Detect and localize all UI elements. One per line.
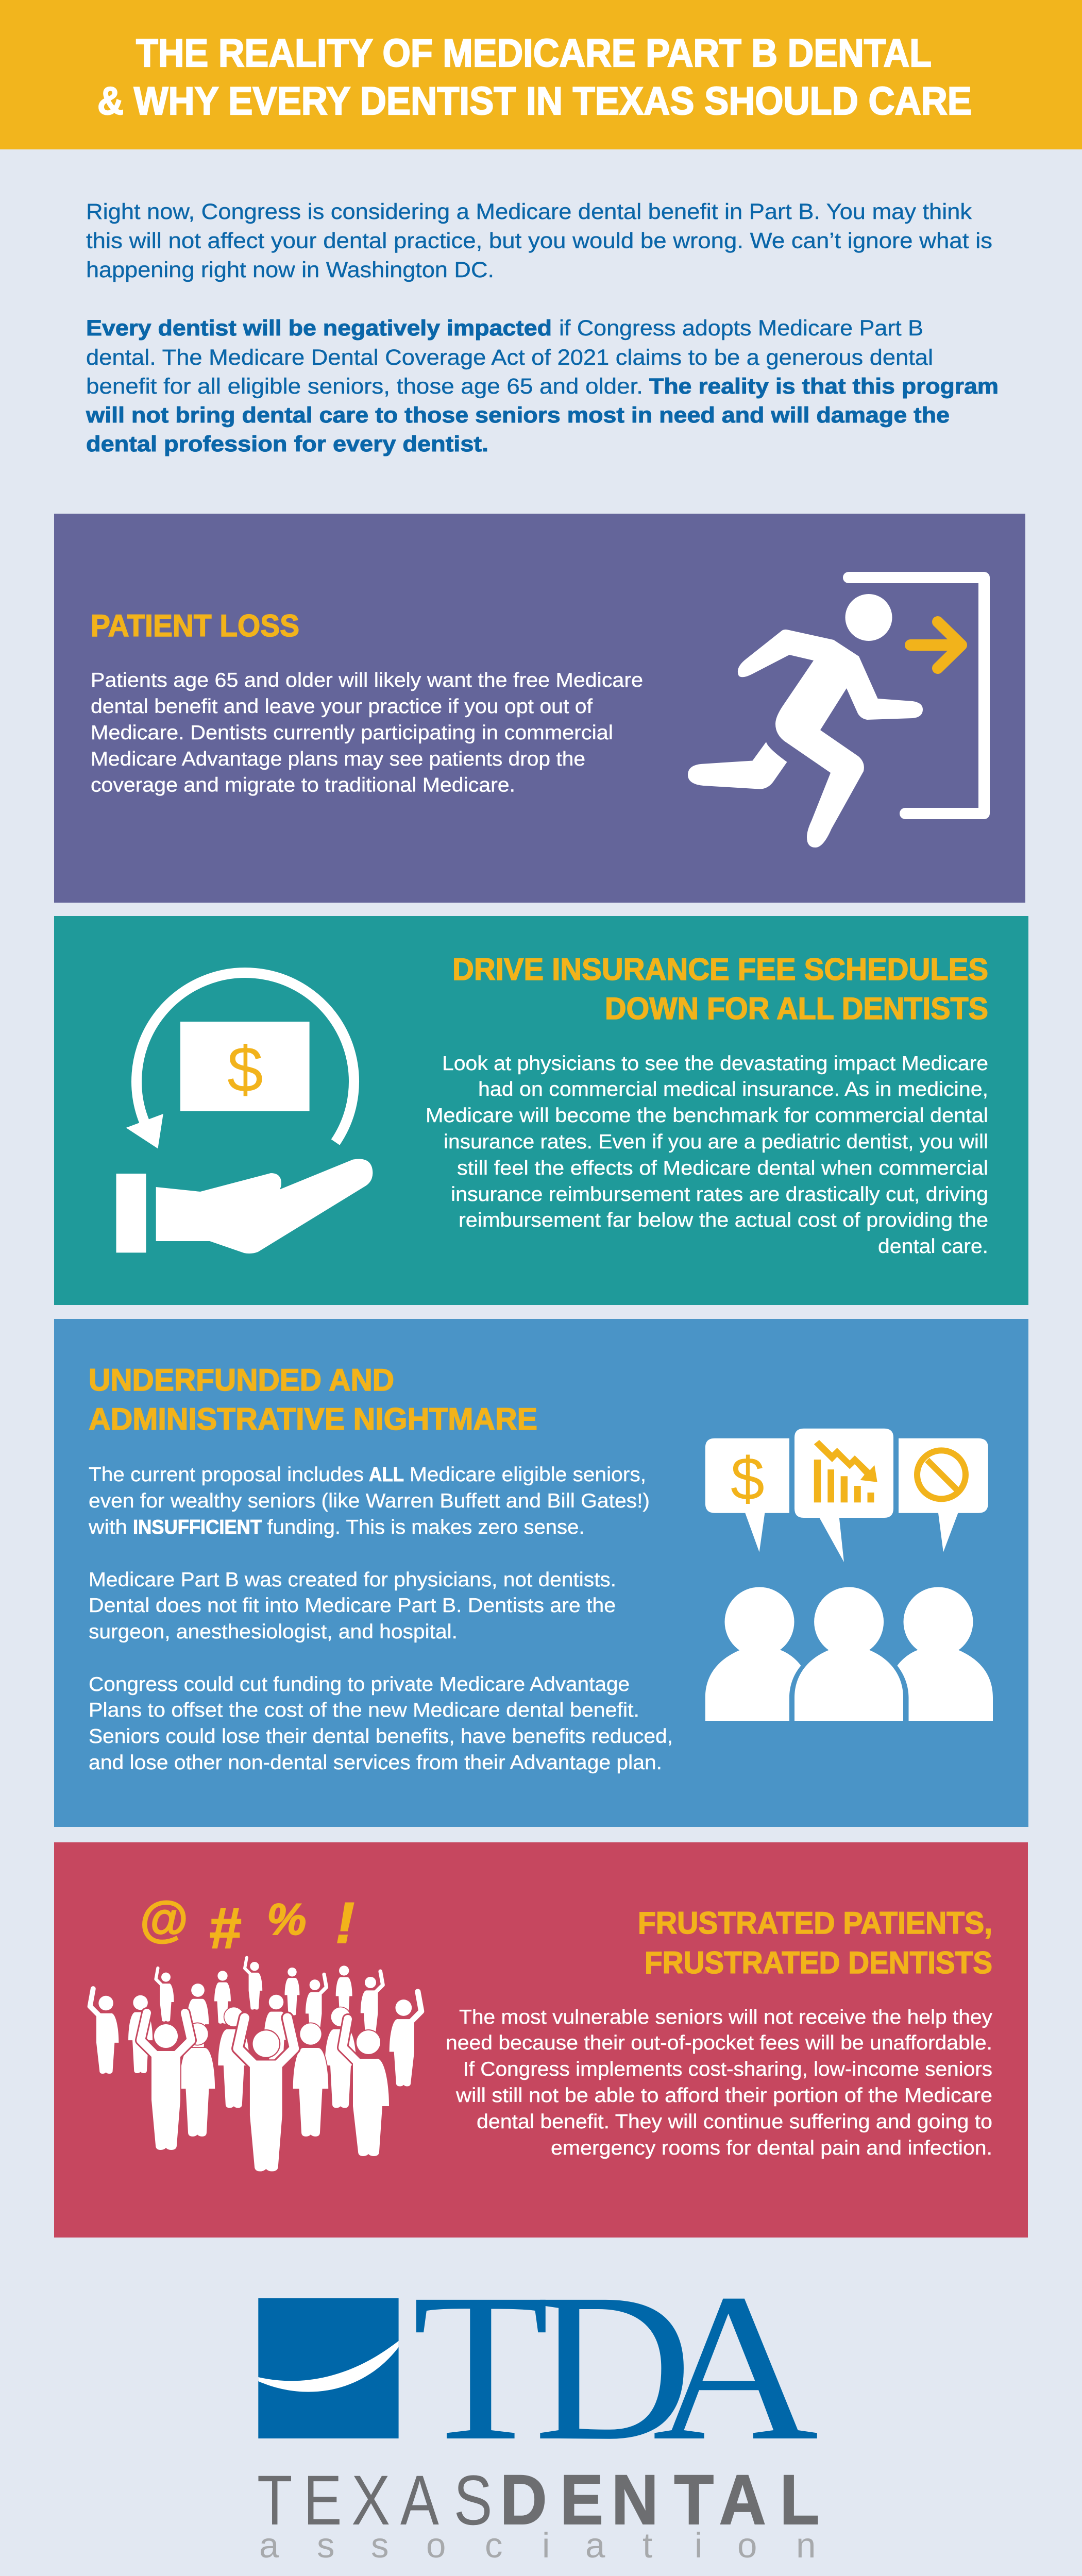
- intro paragraph 2: benefit for all eligible seniors, those age 65 and older.: [86, 374, 643, 399]
- text: underfunded paragraph 1: The current proposal includes: [89, 1464, 364, 1486]
- text: underfunded paragraph 3: Congress could cut funding to private Medicare Advantage: [89, 1673, 630, 1696]
- panel: drive insurance fee schedules down: [54, 916, 1028, 1305]
- heading: drive insurance fee schedules: DOWN FOR ALL DENTISTS: [605, 991, 988, 1026]
- text: patient loss body: Medicare Advantage plans may see patients drop the: [91, 748, 585, 770]
- logo wordmark: TDA: T: [412, 2250, 549, 2484]
- logo text: Texas Dental: [257, 2460, 819, 2540]
- text: frustrated body: will still not be able to afford their portion of the Medicare: [455, 2084, 992, 2107]
- intro paragraph 2: dental profession for every dentist.: [86, 432, 488, 456]
- text: frustrated body: [446, 2006, 993, 2159]
- intro paragraph 2: [86, 316, 999, 456]
- intro paragraph 1: Right now, Congress is considering a Medicare dental benefit in Part B. You may think: [86, 199, 972, 224]
- heading: frustrated patients: FRUSTRATED PATIENTS,: [638, 1906, 992, 1940]
- text: underfunded paragraph 3: Plans to offset the cost of the new Medicare dental benefit.: [89, 1699, 639, 1721]
- text: underfunded paragraph 3: [89, 1673, 673, 1774]
- intro paragraph 2: dental. The Medicare Dental Coverage Act of 2021 claims to be a generous dental: [86, 345, 933, 370]
- heading: drive insurance fee schedules: [452, 952, 988, 1026]
- title banner: THE REALITY OF MEDICARE PART B DENTAL: [136, 31, 932, 75]
- panel: frustrated patients, frustrated dentists: [54, 1842, 1028, 2238]
- text: patient loss body: Medicare. Dentists currently participating in commercial: [91, 722, 613, 744]
- text: patient loss body: [91, 669, 643, 796]
- title banner: & WHY EVERY DENTIST IN TEXAS SHOULD CARE: [97, 79, 972, 123]
- heading: frustrated patients: [638, 1906, 992, 1980]
- text: fee schedules body: insurance rates. Even if you are a pediatric dentist, you will: [444, 1131, 988, 1153]
- intro paragraph 2: if Congress adopts Medicare Part B: [559, 316, 923, 341]
- panel: underfunded and administrative nightmare: [54, 1319, 1028, 1827]
- heading: underfunded: UNDERFUNDED AND: [89, 1363, 394, 1397]
- logo: Texas Dental Association: [257, 2250, 819, 2565]
- icon: person running out of a door: [688, 578, 984, 848]
- icon: hand with circulating money: [116, 973, 373, 1253]
- text: frustrated body: The most vulnerable seniors will not receive the help they: [459, 2006, 993, 2028]
- text: fee schedules body: had on commercial medical insurance. As in medicine,: [478, 1078, 988, 1100]
- text: fee schedules body: [426, 1053, 988, 1258]
- icon: three people: [705, 1587, 993, 1721]
- heading: underfunded: ADMINISTRATIVE NIGHTMARE: [89, 1402, 537, 1436]
- heading: patient loss: PATIENT LOSS: [91, 608, 299, 643]
- text: frustrated body: dental benefit. They will continue suffering and going to: [477, 2111, 992, 2133]
- logo text: association: association: [259, 2526, 816, 2565]
- heading: frustrated patients: FRUSTRATED DENTISTS: [645, 1945, 992, 1980]
- title banner: [0, 0, 1082, 149]
- icon: frustration symbols: [139, 1891, 354, 1960]
- text: underfunded paragraph 1: funding. This is makes zero sense.: [267, 1516, 584, 1538]
- text: fee schedules body: Look at physicians to see the devastating impact Medicare: [442, 1053, 988, 1075]
- text: underfunded paragraph 1: Medicare eligible seniors,: [410, 1464, 646, 1486]
- icon: frustration symbols: #: [209, 1896, 241, 1960]
- text: underfunded paragraph 1: ALL: [369, 1464, 404, 1486]
- text: underfunded paragraph 1: even for wealthy seniors (like Warren Buffett and Bill Gates!): [89, 1490, 650, 1512]
- logo wordmark: TDA: A: [652, 2250, 819, 2484]
- logo wordmark: TDA: [412, 2250, 819, 2484]
- text: frustrated body: need because their out-of-pocket fees will be unaffordable.: [446, 2032, 992, 2054]
- text: fee schedules body: insurance reimbursement rates are drastically cut, driving: [451, 1183, 988, 1206]
- text: patient loss body: Patients age 65 and older will likely want the free Medicare: [91, 669, 643, 691]
- text: underfunded paragraph 3: Seniors could lose their dental benefits, have benefits reduced,: [89, 1725, 673, 1748]
- icon: frustration symbols: @: [139, 1892, 188, 1947]
- intro paragraph 2: Every dentist will be negatively impacted: [86, 316, 552, 341]
- icon: frustration symbols: !: [335, 1891, 354, 1955]
- icon: speech bubbles: [705, 1429, 988, 1562]
- heading: drive insurance fee schedules: DRIVE INSURANCE FEE SCHEDULES: [452, 952, 988, 987]
- text: fee schedules body: dental care.: [878, 1235, 988, 1258]
- intro paragraph 2: will not bring dental care to those seniors most in need and will damage the: [86, 403, 950, 428]
- text: underfunded paragraph 2: Dental does not fit into Medicare Part B. Dentists are the: [89, 1595, 616, 1617]
- icon: speech bubbles: $: [731, 1445, 765, 1513]
- logo text: Texas Dental: DENTAL: [500, 2460, 819, 2539]
- icon: hand with circulating money: $: [227, 1034, 263, 1106]
- logo wordmark: TDA: D: [534, 2250, 692, 2484]
- icon: crowd of people with raised arms: [90, 1958, 421, 2172]
- heading: underfunded: [89, 1363, 537, 1436]
- text: frustrated body: If Congress implements cost-sharing, low-income seniors: [463, 2058, 992, 2080]
- logo text: Texas Dental: TEXAS: [257, 2461, 493, 2540]
- text: underfunded paragraph 2: Medicare Part B was created for physicians, not dentists.: [89, 1569, 616, 1591]
- panel: patient loss: [54, 514, 1025, 903]
- text: underfunded paragraph 3: and lose other non-dental services from their Advantage plan.: [89, 1752, 662, 1774]
- text: underfunded paragraph 1: with: [88, 1516, 127, 1538]
- text: frustrated body: emergency rooms for dental pain and infection.: [551, 2137, 992, 2159]
- text: underfunded paragraph 1: [88, 1464, 650, 1538]
- text: fee schedules body: still feel the effects of Medicare dental when commercial: [457, 1157, 988, 1179]
- text: patient loss body: dental benefit and leave your practice if you opt out of: [91, 696, 593, 718]
- intro paragraph 2: The reality is that this program: [649, 374, 999, 399]
- text: patient loss body: coverage and migrate to traditional Medicare.: [91, 774, 515, 796]
- intro paragraph 1: this will not affect your dental practice, but you would be wrong. We can’t ignore what is: [86, 229, 992, 253]
- text: underfunded paragraph 1: INSUFFICIENT: [133, 1516, 262, 1538]
- text: underfunded paragraph 2: surgeon, anesthesiologist, and hospital.: [89, 1621, 458, 1643]
- icon: frustration symbols: %: [267, 1895, 306, 1944]
- text: fee schedules body: reimbursement far below the actual cost of providing the: [459, 1209, 988, 1231]
- text: fee schedules body: Medicare will become the benchmark for commercial dental: [426, 1105, 988, 1127]
- intro paragraph 1: [86, 199, 992, 282]
- text: underfunded paragraph 2: [89, 1569, 616, 1643]
- logo mark: blue square with smile: [258, 2298, 399, 2438]
- intro paragraph 1: happening right now in Washington DC.: [86, 258, 494, 282]
